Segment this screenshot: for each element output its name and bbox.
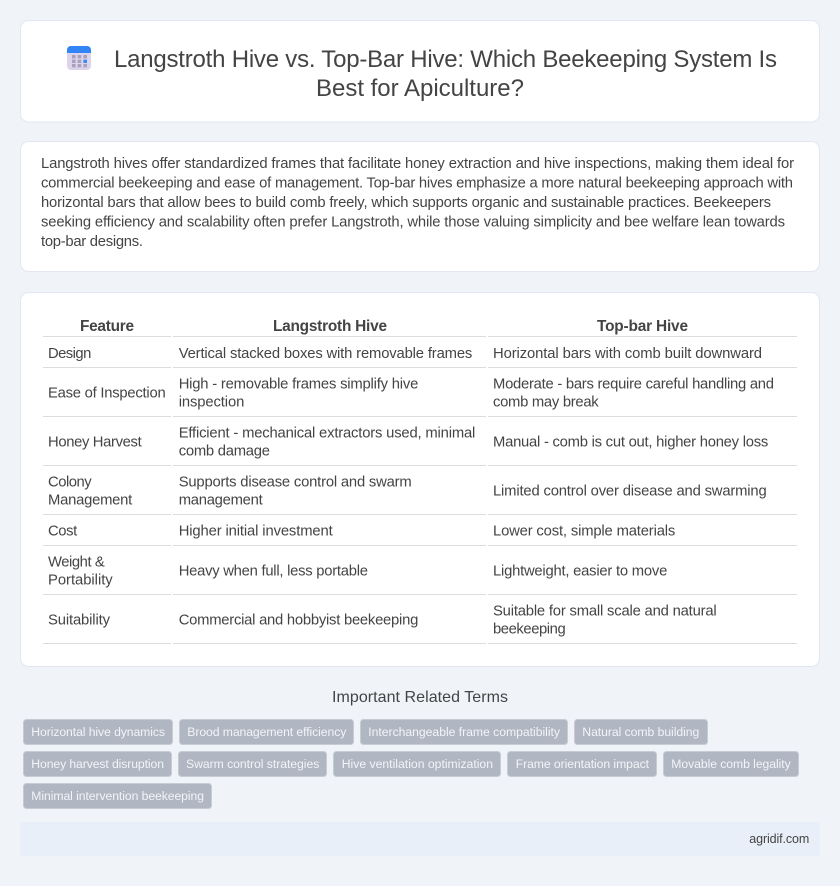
row: design bbox=[48, 346, 762, 362]
row: cost: Higher initial investment bbox=[179, 524, 333, 540]
row: honey harvest: Honey Harvest bbox=[48, 435, 142, 451]
row: colony management: Supports disease control and swarm bbox=[179, 475, 412, 491]
row: honey harvest: Manual - comb is cut out, higher honey loss bbox=[493, 435, 768, 451]
row: colony management: Limited control over disease and swarming bbox=[493, 484, 767, 500]
tag: hive ventilation optimization bbox=[334, 752, 500, 776]
panel: related term tags bbox=[24, 720, 798, 808]
icon: calendar grid bbox=[67, 46, 91, 70]
row: honey harvest: Efficient - mechanical extractors used, minimal bbox=[179, 426, 475, 442]
row: cost bbox=[48, 524, 675, 540]
tag: natural comb building: Natural comb building bbox=[582, 725, 699, 739]
row: weight and portability: Lightweight, easier to move bbox=[493, 564, 667, 580]
row: colony management bbox=[48, 475, 767, 509]
row: colony management: Colony bbox=[48, 475, 92, 491]
row: ease of inspection: High - removable frames simplify hive bbox=[179, 377, 418, 393]
text block: summary: commercial beekeeping and ease of management. Top-bar hives emphasize a more natural beekeeping approach with bbox=[41, 176, 793, 192]
table header row: Feature bbox=[80, 318, 134, 335]
row: cost: Lower cost, simple materials bbox=[493, 524, 675, 540]
row: cost: Cost bbox=[48, 524, 77, 540]
row: honey harvest: comb damage bbox=[179, 444, 270, 460]
tag: swarm control strategies: Swarm control strategies bbox=[186, 757, 319, 771]
tag: minimal intervention beekeeping bbox=[24, 784, 212, 808]
row: suitability bbox=[48, 604, 717, 638]
row: ease of inspection: Moderate - bars require careful handling and bbox=[493, 377, 774, 393]
row: weight and portability bbox=[48, 555, 667, 589]
tag: horizontal hive dynamics: Horizontal hive dynamics bbox=[31, 725, 165, 739]
row: honey harvest bbox=[48, 426, 768, 460]
tag: minimal intervention beekeeping: Minimal intervention beekeeping bbox=[31, 789, 204, 803]
title: Best for Apiculture? bbox=[316, 75, 524, 102]
tag: interchangeable frame compatibility bbox=[360, 720, 568, 744]
table header row: Top-bar Hive bbox=[597, 318, 688, 335]
tag: brood management efficiency: Brood management efficiency bbox=[187, 725, 347, 739]
table header row: Langstroth Hive bbox=[273, 318, 387, 335]
tag: frame orientation impact: Frame orientation impact bbox=[516, 757, 650, 771]
tag: horizontal hive dynamics bbox=[24, 720, 172, 744]
tag: brood management efficiency bbox=[180, 720, 354, 744]
row: weight and portability: Portability bbox=[48, 573, 113, 589]
row: ease of inspection: comb may break bbox=[493, 395, 599, 411]
row: design: Horizontal bars with comb built downward bbox=[493, 346, 762, 362]
row: design: Vertical stacked boxes with removable frames bbox=[179, 346, 472, 362]
text block: summary bbox=[41, 156, 794, 250]
tag: frame orientation impact bbox=[508, 752, 656, 776]
row: suitability: Suitability bbox=[48, 613, 111, 629]
tag: natural comb building bbox=[574, 720, 708, 744]
title: Langstroth Hive vs. Top-Bar Hive: Which Beekeeping System Is bbox=[114, 46, 777, 73]
tag: movable comb legality: Movable comb legality bbox=[671, 757, 792, 771]
panel: comparison table bbox=[20, 292, 820, 666]
text block: summary: horizontal bars that allow bees to build comb freely, which supports organic and sustainable practices. Beekeepers bbox=[41, 195, 771, 211]
row: design: Design bbox=[48, 346, 91, 362]
row: suitability: Suitable for small scale and natural bbox=[493, 604, 717, 620]
row: ease of inspection bbox=[48, 377, 774, 411]
row: weight and portability: Weight & bbox=[48, 555, 105, 571]
row: colony management: management bbox=[179, 493, 263, 509]
row: suitability: Commercial and hobbyist beekeeping bbox=[179, 613, 418, 629]
footer source: agridif.com bbox=[749, 832, 809, 846]
panel: summary paragraph bbox=[20, 142, 820, 272]
tag: movable comb legality bbox=[664, 752, 798, 776]
row: ease of inspection: inspection bbox=[179, 395, 244, 411]
text block: summary: seeking efficiency and scalability often prefer Langstroth, while those valuing simplicity and bee welfare lean towards bbox=[41, 214, 785, 230]
row: weight and portability: Heavy when full, less portable bbox=[179, 564, 368, 580]
footer bar bbox=[20, 822, 820, 856]
tag: honey harvest disruption bbox=[24, 752, 172, 776]
row: colony management: Management bbox=[48, 493, 132, 509]
table header row bbox=[80, 318, 688, 335]
panel: header bbox=[20, 20, 820, 122]
heading: related terms: Important Related Terms bbox=[332, 689, 508, 706]
tag: swarm control strategies bbox=[178, 752, 326, 776]
text block: summary: Langstroth hives offer standardized frames that facilitate honey extraction and hive inspections, making them ideal for bbox=[41, 156, 794, 172]
title bbox=[114, 46, 777, 102]
tag: honey harvest disruption: Honey harvest disruption bbox=[31, 757, 164, 771]
tag: hive ventilation optimization: Hive ventilation optimization bbox=[342, 757, 493, 771]
row: suitability: beekeeping bbox=[493, 622, 566, 638]
text block: summary: top-bar designs. bbox=[41, 234, 143, 250]
row: ease of inspection: Ease of Inspection bbox=[48, 386, 166, 402]
tag: interchangeable frame compatibility: Interchangeable frame compatibility bbox=[368, 725, 561, 739]
